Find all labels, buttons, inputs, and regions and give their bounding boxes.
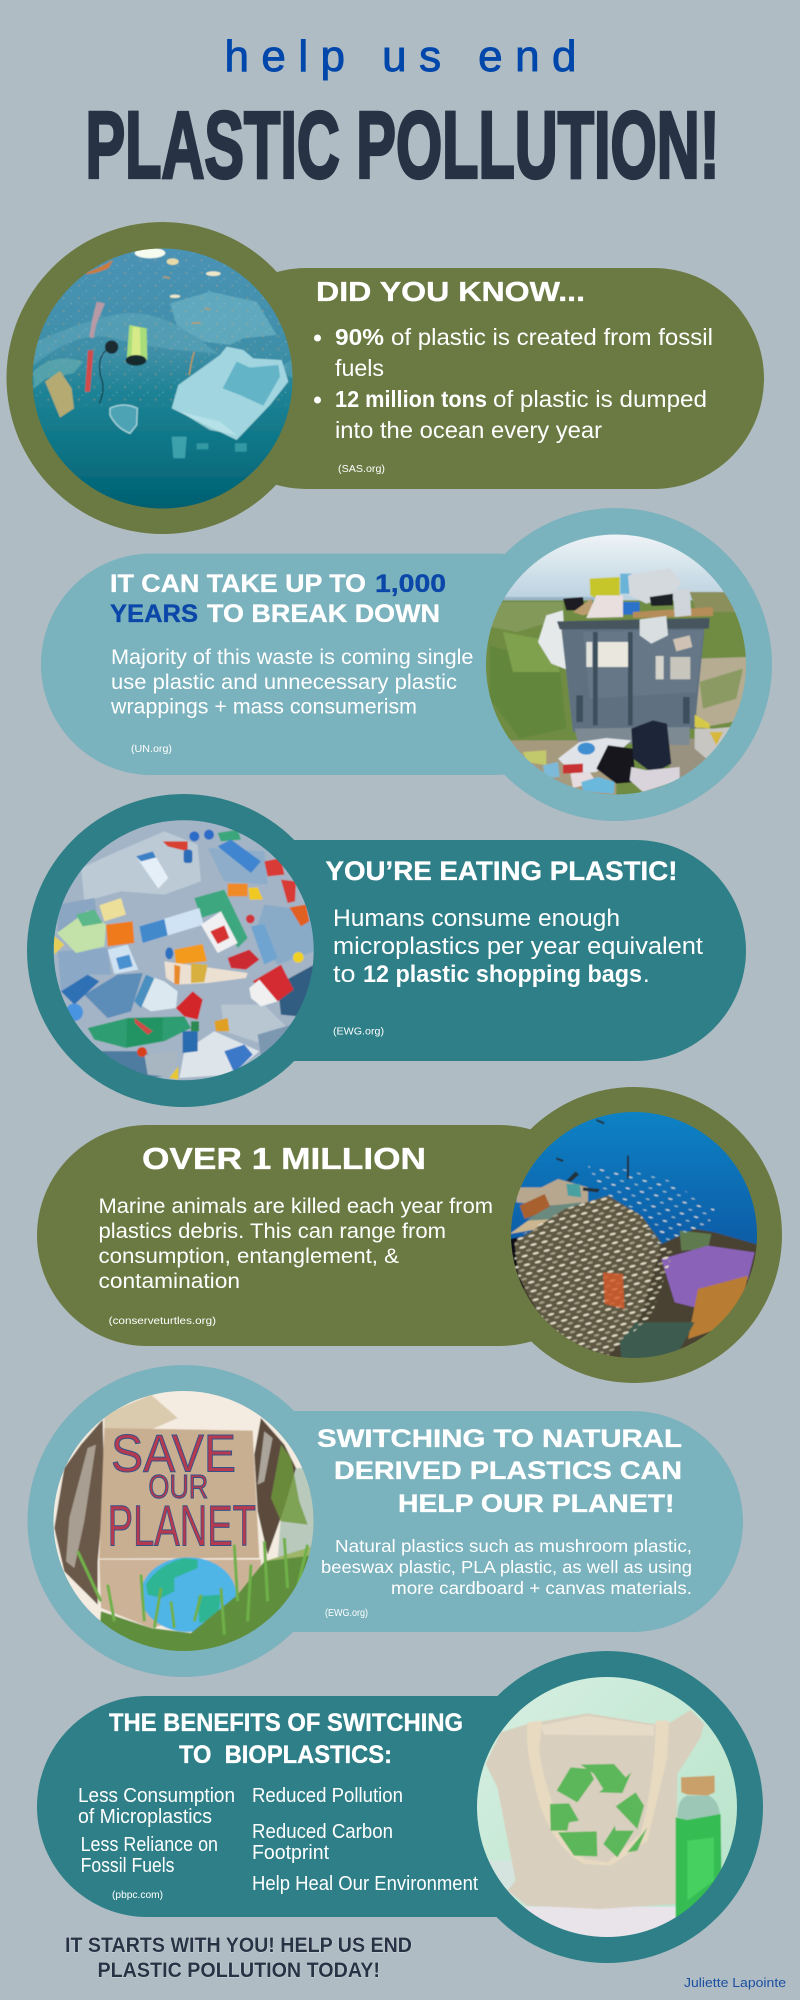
body text: to bbox=[333, 961, 356, 988]
heading: TO BIOPLASTICS: bbox=[179, 1741, 392, 1769]
circle backing bbox=[28, 1365, 340, 1677]
closing call to action bbox=[65, 1934, 412, 1982]
bullet: 90 percent: fuels bbox=[335, 355, 384, 381]
heading: HELP OUR PLANET! bbox=[398, 1490, 674, 1518]
body text: 12 plastic shopping bags bbox=[363, 961, 642, 988]
heading: SWITCHING TO NATURAL bbox=[317, 1425, 682, 1453]
bullet: 12 million tons: of plastic is dumped bbox=[493, 386, 707, 412]
right benefit list bbox=[252, 1785, 478, 1895]
source: (conserveturtles.org) bbox=[109, 1315, 216, 1327]
body text: consumption, entanglement, & bbox=[98, 1245, 399, 1268]
circle backing bbox=[451, 1651, 763, 1963]
source: (UN.org) bbox=[131, 743, 172, 755]
body text bbox=[321, 1536, 692, 1598]
photo: plastic bag in the ocean bbox=[30, 245, 297, 512]
photo: save our planet sign bbox=[51, 1388, 318, 1655]
heading bbox=[109, 1709, 463, 1769]
closing call to action: PLASTIC POLLUTION TODAY! bbox=[98, 1959, 380, 1982]
heading bbox=[317, 1425, 682, 1518]
body text: more cardboard + canvas materials. bbox=[391, 1578, 692, 1598]
heading: DID YOU KNOW... bbox=[316, 276, 585, 307]
bullet: 90 percent: 90% bbox=[335, 324, 384, 350]
body text: Marine animals are killed each year from bbox=[98, 1195, 493, 1218]
circle backing bbox=[486, 1087, 782, 1383]
bullet: 12 million tons: 12 million tons bbox=[335, 386, 487, 412]
source: (EWG.org) bbox=[333, 1026, 384, 1038]
body text: . bbox=[643, 961, 650, 988]
right benefit list: Reduced Pollution bbox=[252, 1785, 403, 1807]
left benefit list: (pbpc.com) bbox=[112, 1889, 163, 1901]
pill and circle backing bbox=[6, 222, 764, 534]
photo: overflowing dumpster bbox=[483, 532, 750, 800]
body text: Humans consume enough bbox=[333, 905, 620, 932]
bullet: 12 million tons: into the ocean every year bbox=[335, 417, 602, 443]
body text: Majority of this waste is coming single bbox=[111, 646, 474, 669]
left benefit list: of Microplastics bbox=[78, 1806, 212, 1828]
bullet: 90 percent bbox=[314, 324, 713, 381]
pill backing bbox=[37, 1696, 610, 1917]
photo: coral reef and fish bbox=[508, 1109, 761, 1362]
body text: microplastics per year equivalent bbox=[333, 933, 703, 960]
pill backing bbox=[180, 1411, 743, 1632]
heading: TO BREAK DOWN bbox=[207, 600, 440, 628]
body text: contamination bbox=[98, 1270, 240, 1293]
heading bbox=[110, 570, 446, 628]
photo: save our planet sign: OUR bbox=[148, 1469, 208, 1506]
panel: over 1 million bbox=[37, 1087, 782, 1383]
body text bbox=[98, 1195, 493, 1293]
source: (EWG.org) bbox=[325, 1607, 368, 1619]
body text: beeswax plastic, PLA plastic, as well as using bbox=[321, 1557, 692, 1577]
pill backing bbox=[41, 554, 605, 775]
pill backing bbox=[37, 1125, 610, 1346]
body text: wrappings + mass consumerism bbox=[110, 696, 417, 718]
left benefit list: Less Consumption bbox=[78, 1785, 235, 1807]
subtitle: help us end: help us end bbox=[224, 32, 576, 81]
panel: 1000 years to break down bbox=[41, 508, 772, 821]
circle backing bbox=[27, 794, 340, 1107]
photo: save our planet sign: PLANET bbox=[108, 1494, 256, 1558]
body text bbox=[110, 646, 473, 718]
left benefit list: Less Reliance on bbox=[81, 1834, 218, 1856]
photo: pile of plastic bottles bbox=[51, 818, 318, 1085]
heading: YOU’RE EATING PLASTIC! bbox=[326, 856, 678, 886]
right benefit list: Footprint bbox=[252, 1842, 329, 1864]
body text: plastics debris. This can range from bbox=[98, 1220, 446, 1243]
author credit: Juliette Lapointe bbox=[684, 1975, 786, 1990]
right benefit list: Help Heal Our Environment bbox=[252, 1873, 478, 1895]
heading: 1,000 bbox=[375, 570, 446, 598]
pill backing bbox=[180, 840, 746, 1061]
right benefit list: Reduced Carbon bbox=[252, 1821, 393, 1843]
heading: DERIVED PLASTICS CAN bbox=[334, 1457, 682, 1485]
panel: switching to natural plastics bbox=[28, 1365, 743, 1677]
left benefit list bbox=[78, 1785, 235, 1901]
left benefit list: Fossil Fuels bbox=[81, 1855, 174, 1877]
heading: IT CAN TAKE UP TO bbox=[110, 570, 366, 598]
source: (SAS.org) bbox=[338, 463, 385, 475]
circle backing bbox=[459, 508, 772, 821]
bullet: 90 percent: of plastic is created from fossil bbox=[391, 324, 713, 350]
bullet: 12 million tons bbox=[314, 386, 707, 443]
body text bbox=[333, 905, 703, 988]
photo: save our planet sign: SAVE bbox=[111, 1424, 236, 1483]
body text: Natural plastics such as mushroom plastic, bbox=[335, 1536, 692, 1556]
panel: benefits of switching to bioplastics bbox=[37, 1651, 763, 1963]
heading: YEARS bbox=[110, 600, 198, 628]
heading: THE BENEFITS OF SWITCHING bbox=[109, 1709, 463, 1737]
body text: use plastic and unnecessary plastic bbox=[111, 671, 457, 694]
heading: OVER 1 MILLION bbox=[142, 1141, 426, 1176]
photo: recycled tote bag and bottle bbox=[474, 1674, 741, 1943]
panel: you're eating plastic bbox=[27, 794, 746, 1107]
panel: did you know bbox=[6, 222, 764, 534]
closing call to action: IT STARTS WITH YOU! HELP US END bbox=[65, 1934, 412, 1957]
